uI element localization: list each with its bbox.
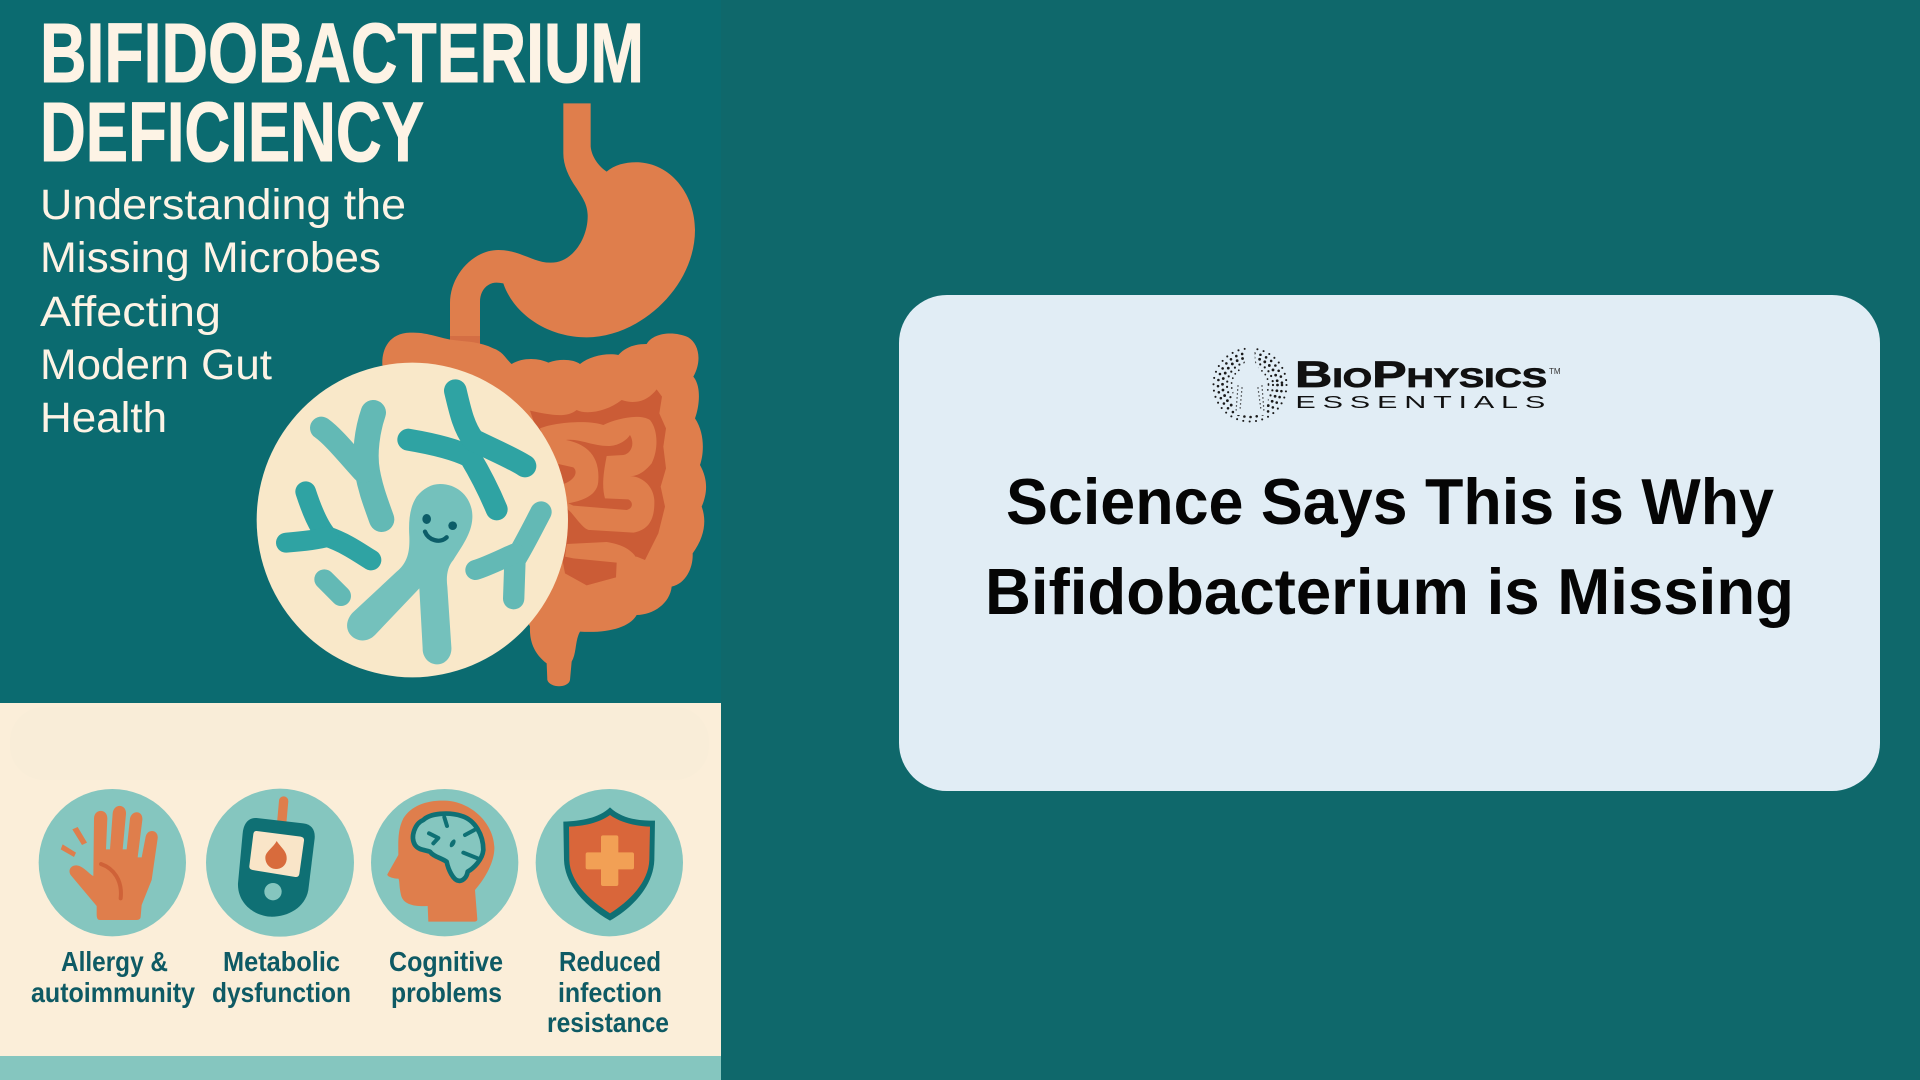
panel: headline card bbox=[899, 295, 1880, 791]
illustration: intestines bbox=[382, 333, 706, 686]
subtitle: Modern Gut bbox=[40, 341, 272, 389]
labels: symptoms: Reduced bbox=[559, 946, 661, 977]
labels: symptoms: Cognitive bbox=[389, 946, 503, 977]
subtitle: Health bbox=[40, 394, 167, 442]
subtitle: Missing Microbes bbox=[40, 234, 381, 282]
labels: symptoms: dysfunction bbox=[212, 977, 351, 1008]
bacterium: top right bbox=[408, 391, 525, 509]
illustration: stomach bbox=[450, 103, 695, 357]
icon: brain in head bbox=[371, 789, 518, 936]
subtitle bbox=[40, 181, 406, 442]
icon: hand bbox=[39, 789, 186, 936]
bacterium: lower right bbox=[475, 512, 541, 599]
logo wordmark: B IO P HYSICS bbox=[1295, 354, 1547, 395]
headline: Science Says This is Why bbox=[1006, 465, 1774, 538]
headline bbox=[985, 465, 1794, 628]
labels: symptoms: resistance bbox=[547, 1007, 669, 1038]
panel: left poster bbox=[0, 0, 721, 1080]
logo trademark: TM bbox=[1549, 367, 1561, 376]
labels: symptoms: infection bbox=[558, 977, 662, 1008]
labels: symptoms: Allergy & bbox=[61, 946, 168, 977]
labels: symptoms: Metabolic bbox=[223, 946, 340, 977]
bacterium: small rod bbox=[324, 579, 341, 596]
labels: symptoms: problems bbox=[391, 977, 502, 1008]
title bbox=[40, 6, 644, 179]
labels: symptoms bbox=[31, 946, 669, 1038]
bacterium: top left bbox=[321, 413, 382, 519]
icon: shield bbox=[536, 789, 683, 936]
panel: symptoms strip bbox=[0, 703, 721, 1080]
headline: Bifidobacterium is Missing bbox=[985, 555, 1794, 628]
subtitle: Understanding the bbox=[40, 181, 406, 229]
labels: symptoms: autoimmunity bbox=[31, 977, 195, 1008]
illustration: magnified microbes bbox=[257, 363, 568, 677]
icon: glucose meter bbox=[206, 789, 354, 937]
logo mark: dotted figure bbox=[1214, 340, 1286, 422]
bacterium: smiling character bbox=[347, 484, 472, 664]
bacterium: lower left bbox=[286, 492, 371, 560]
title: BIFIDOBACTERIUM bbox=[40, 6, 644, 100]
subtitle: Affecting bbox=[40, 288, 221, 336]
logo tagline: ESSENTIALS bbox=[1295, 392, 1545, 412]
title: DEFICIENCY bbox=[40, 85, 424, 179]
logo: BioPhysics Essentials bbox=[1214, 340, 1561, 422]
